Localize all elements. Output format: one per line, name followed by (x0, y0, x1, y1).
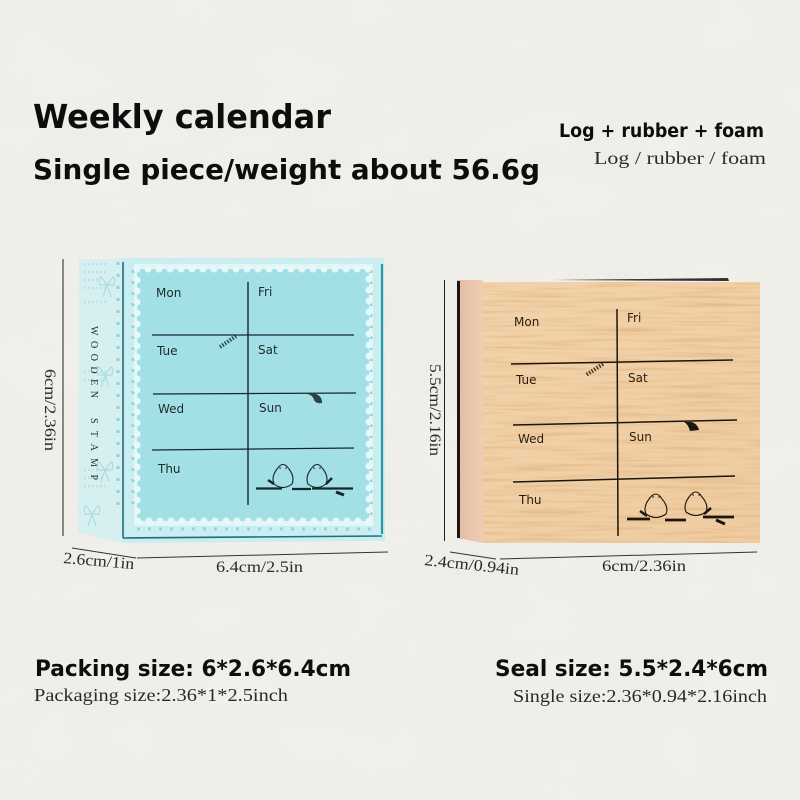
stamp weekday labels: Sun (629, 430, 652, 444)
stamp depth dimension: 2.4cm/0.94in (424, 552, 520, 579)
calendar grid (152, 282, 356, 505)
seal size caption: Seal size: 5.5*2.4*6cm (495, 657, 768, 682)
stamp top edge (553, 278, 729, 281)
box width dimension: 6.4cm/2.5in (216, 559, 303, 576)
stamp leaf marks (586, 364, 699, 431)
wooden stamp illustration (457, 278, 760, 543)
stamp weekday labels: Wed (518, 432, 544, 446)
stamp width dimension: 6cm/2.36in (602, 558, 686, 575)
stamp weekday labels: Mon (514, 315, 539, 329)
weekday labels: Wed (158, 402, 184, 416)
weekday labels: Thu (157, 462, 181, 476)
stamp width dimension (500, 552, 757, 575)
stamp side face (457, 280, 483, 543)
weekday labels: Sat (258, 343, 278, 357)
packing size caption: Packing size: 6*2.6*6.4cm (35, 657, 351, 682)
box front frame (122, 258, 385, 543)
box depth dimension: 2.6cm/1in (63, 550, 135, 573)
stamp weekday labels: Sat (628, 371, 648, 385)
title: Weekly calendar (33, 97, 332, 136)
birds on branch (256, 464, 353, 495)
packing size caption (34, 657, 351, 705)
packaging box illustration (78, 258, 385, 543)
packing size caption: Packaging size:2.36*1*2.5inch (34, 685, 288, 705)
seal size caption (495, 657, 768, 706)
box side panel (78, 259, 123, 543)
stamp birds on branch (627, 492, 734, 524)
stamp front face (483, 282, 760, 543)
subtitle: weight: Single piece/weight about 56.6g (33, 153, 540, 186)
box height dimension: 6cm/2.36in (41, 369, 58, 451)
material block: Log / rubber / foam (594, 148, 766, 168)
scalloped label edge (137, 269, 369, 521)
weekday labels (156, 285, 282, 476)
stamp weekday labels: Fri (627, 311, 641, 325)
stamp height dimension: 5.5cm/2.16in (426, 364, 443, 456)
seal size caption: Single size:2.36*0.94*2.16inch (513, 686, 767, 706)
material block: Log + rubber + foam (559, 121, 764, 142)
weekday labels: Fri (258, 285, 272, 299)
leaf marks (220, 336, 322, 403)
weekday labels: Mon (156, 286, 181, 300)
weekday labels: Tue (156, 344, 178, 358)
stamp calendar grid (511, 309, 737, 536)
material block (559, 121, 766, 168)
box side panel: STAMP (88, 418, 99, 480)
stamp weekday labels: Tue (515, 373, 536, 387)
weekday labels: Sun (259, 401, 282, 415)
box width dimension (137, 552, 388, 576)
box side panel: WOODEN (88, 326, 99, 398)
stamp weekday labels: Thu (518, 493, 542, 507)
stamp weekday labels (514, 311, 652, 507)
blue label (137, 269, 369, 521)
